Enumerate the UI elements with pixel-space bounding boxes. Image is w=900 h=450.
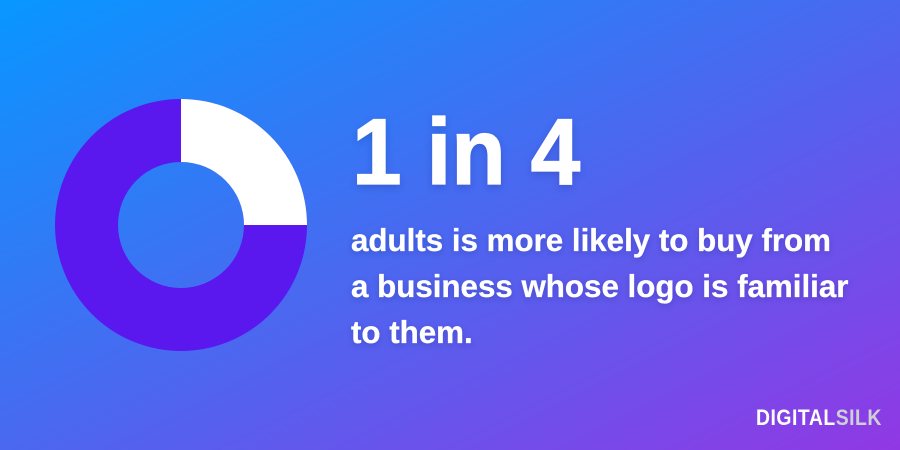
description text bbox=[350, 223, 848, 350]
logo: Digital Silk: DIGITALSILK bbox=[756, 405, 882, 430]
donut chart bbox=[55, 99, 307, 351]
description text: adults is more likely to buy from bbox=[351, 223, 831, 258]
headline statistic: 1 in 4 bbox=[352, 99, 580, 204]
description text: to them. bbox=[351, 315, 473, 350]
description text: a business whose logo is familiar bbox=[351, 269, 848, 304]
